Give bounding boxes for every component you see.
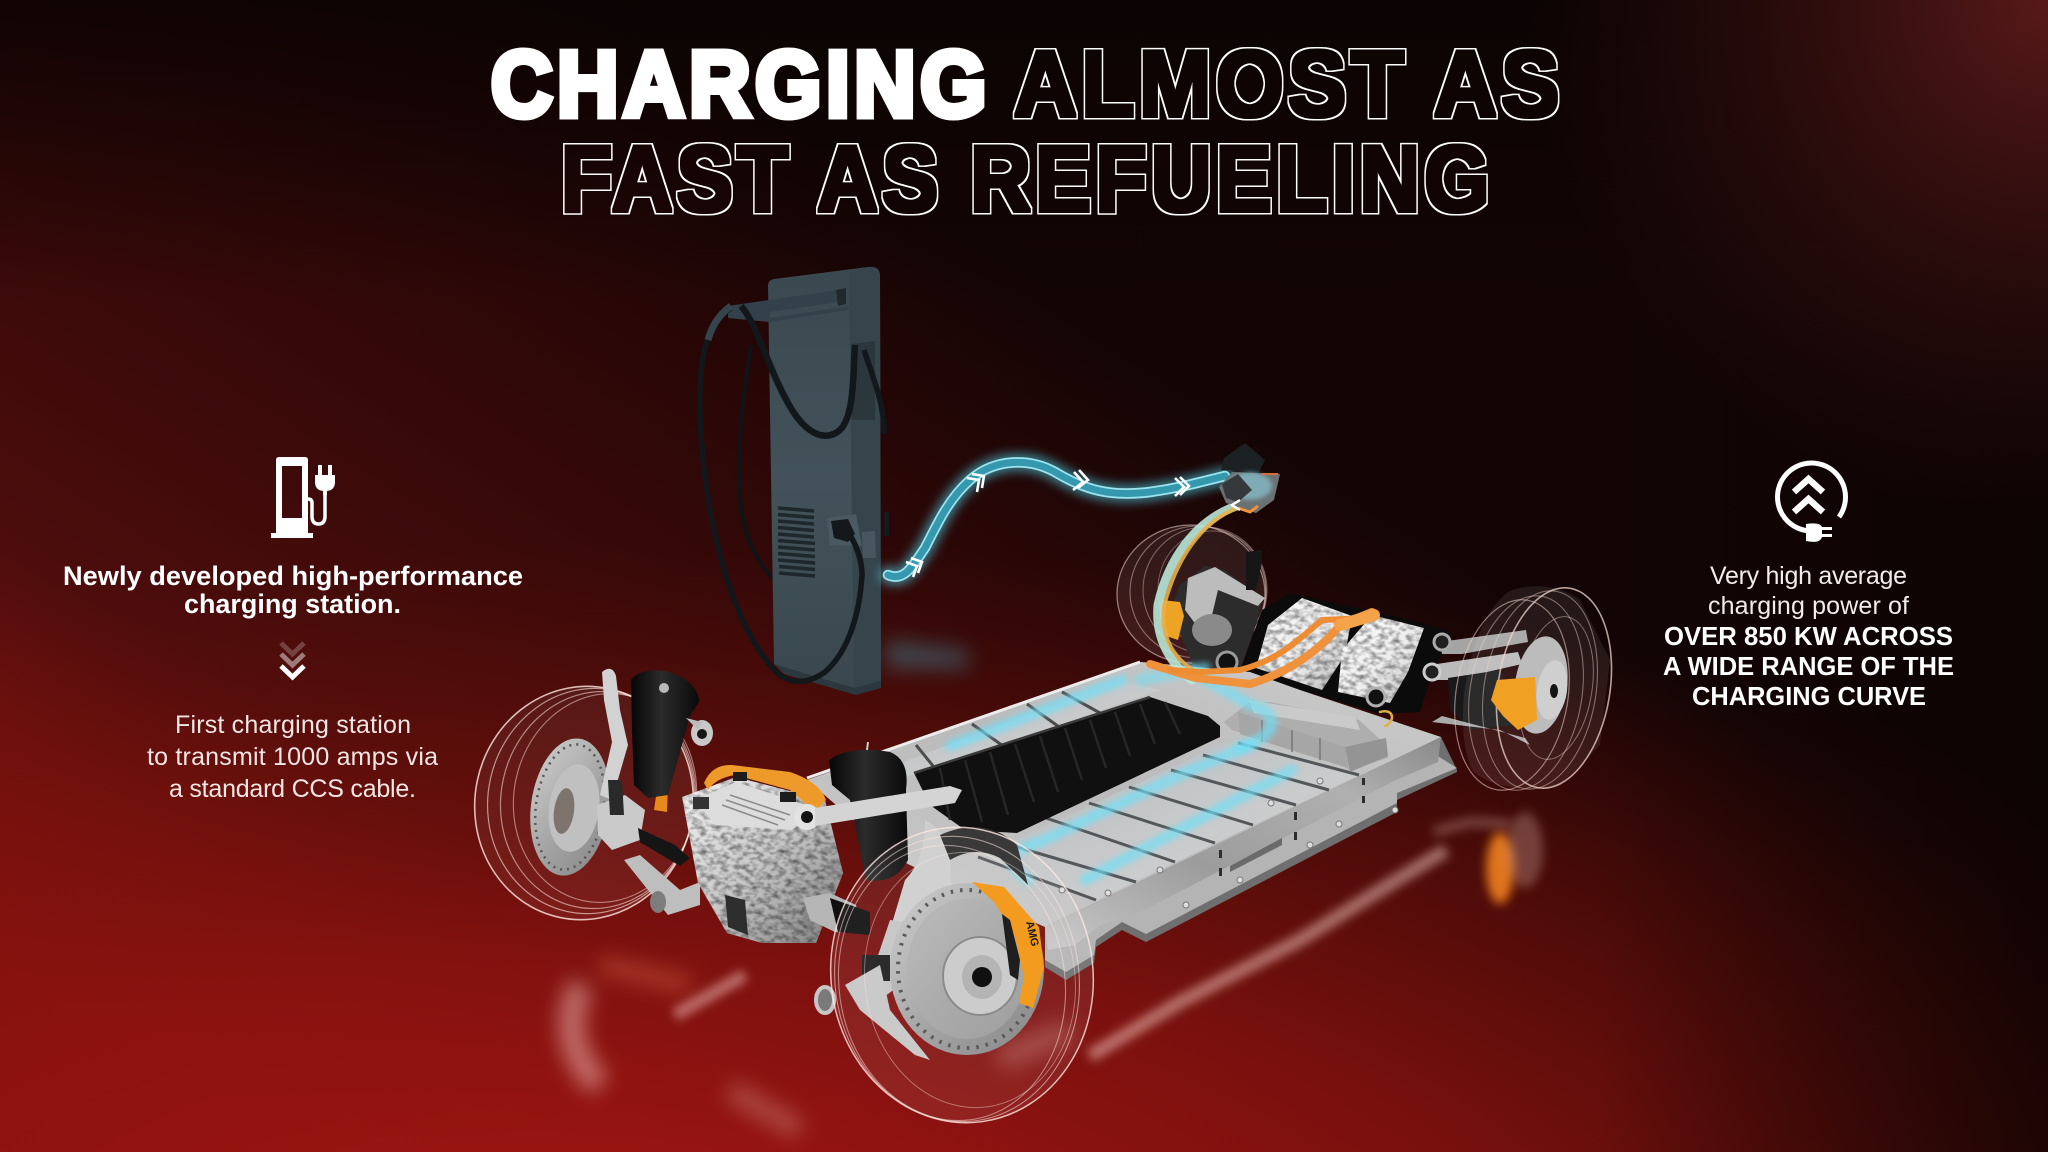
front left bushing — [691, 720, 713, 746]
near battery panels — [978, 737, 1359, 900]
front electric motor — [682, 765, 870, 943]
front right suspension — [815, 742, 965, 1060]
motor mount bushing — [794, 804, 820, 830]
battery controller box — [1224, 702, 1388, 770]
floor reflections — [572, 640, 1543, 1130]
arrow chevrons on cable — [906, 470, 1189, 577]
far panel separators — [916, 692, 1100, 772]
central battery tunnel — [914, 697, 1220, 833]
front right link arm — [815, 786, 962, 826]
far battery panels — [835, 680, 1160, 788]
charger cable grips — [708, 306, 731, 340]
charger cables — [700, 306, 884, 681]
charger flap — [862, 531, 876, 558]
panel: charging station text — [63, 457, 523, 803]
front right hub — [943, 937, 1017, 1015]
right drive shaft — [803, 893, 861, 933]
panel: charging power text — [1663, 463, 1954, 711]
rear right wheel — [1442, 579, 1625, 799]
orange high voltage cables — [1150, 505, 1392, 726]
title outlined words, line 1: ALMOST AS — [1014, 31, 1564, 136]
front right upper knuckle — [890, 820, 965, 950]
front right wheel — [812, 810, 1112, 1140]
icon: down chevrons — [281, 643, 304, 677]
value: over 850 kw across: OVER 850 KW ACROSS — [1664, 621, 1953, 651]
icon: charging station — [271, 457, 335, 538]
platform top surface — [807, 662, 1441, 927]
title — [491, 31, 1564, 231]
side wall slots — [1219, 778, 1365, 876]
heading: newly developed: Newly developed high-performance — [63, 561, 523, 591]
front lower arm — [624, 855, 700, 915]
rear far wheel — [1117, 525, 1267, 663]
rear motor frame — [1237, 593, 1452, 714]
motor top plate — [695, 782, 815, 830]
platform side wall — [1045, 737, 1441, 950]
front left upper arm — [600, 669, 628, 800]
charging station — [700, 267, 889, 695]
front right air spring — [829, 750, 908, 881]
text: charging power of: charging power of — [1708, 592, 1909, 620]
value: charging curve: CHARGING CURVE — [1692, 681, 1926, 711]
rear brake caliper — [1491, 677, 1537, 730]
icon: fast charging plug — [1778, 463, 1846, 542]
rear right brake — [1491, 633, 1574, 737]
text: standard CCS cable: a standard CCS cable. — [169, 775, 416, 803]
plug connector — [1219, 443, 1280, 513]
front left brake and suspension — [522, 669, 713, 915]
text: very high average: Very high average — [1710, 562, 1907, 590]
charger socket — [827, 514, 862, 546]
charger base — [774, 664, 881, 695]
value: wide range of the: A WIDE RANGE OF THE — [1663, 651, 1954, 681]
charger holster slot — [852, 341, 875, 420]
front right brake — [890, 882, 1044, 1055]
charger vent — [778, 508, 815, 576]
rear left knuckle — [1170, 566, 1262, 670]
near panel separators — [978, 743, 1359, 900]
rear motor unit one — [1256, 598, 1352, 690]
rear motor unit two — [1338, 615, 1424, 703]
motor orange high voltage box — [704, 765, 826, 812]
title outlined words, line 2: FAST AS REFUELING — [561, 126, 1494, 231]
charging cable glow — [888, 462, 1225, 577]
platform bolts — [1059, 778, 1398, 908]
front lower casting — [845, 965, 930, 1060]
motor connectors — [693, 772, 796, 809]
rear brake disc — [1508, 633, 1574, 737]
motor housing — [682, 777, 843, 943]
rear axle assembly — [1160, 550, 1530, 745]
rear control arms — [1440, 630, 1528, 654]
front left wheel — [453, 666, 716, 940]
blue energy streaks — [950, 668, 1292, 880]
text: to transmit 1000 amps: to transmit 1000 amps via — [147, 743, 438, 771]
charger arm — [728, 289, 849, 322]
charger side face — [849, 267, 881, 693]
rear tunnel hose detail — [940, 827, 1028, 885]
text: first charging station: First charging station — [175, 711, 411, 739]
caliper badge: AMG — [1023, 920, 1041, 948]
front right hub carrier — [868, 920, 925, 1000]
rear left caliper — [1160, 600, 1184, 640]
charger body — [768, 267, 881, 693]
battery platform — [807, 662, 1457, 980]
front left knuckle — [597, 795, 645, 850]
motor dark cover — [725, 895, 748, 935]
front right disc — [890, 883, 1044, 1055]
front left air spring — [631, 670, 699, 798]
front left disc — [522, 733, 618, 881]
title word: CHARGING: CHARGING — [491, 32, 991, 136]
front left caliper edge — [654, 770, 668, 812]
far side edge highlight — [807, 662, 1140, 778]
platform lower flange — [1045, 737, 1457, 980]
heading: charging station: charging station. — [184, 589, 401, 619]
front right caliper — [972, 882, 1044, 1008]
charger rear cable — [739, 345, 774, 580]
